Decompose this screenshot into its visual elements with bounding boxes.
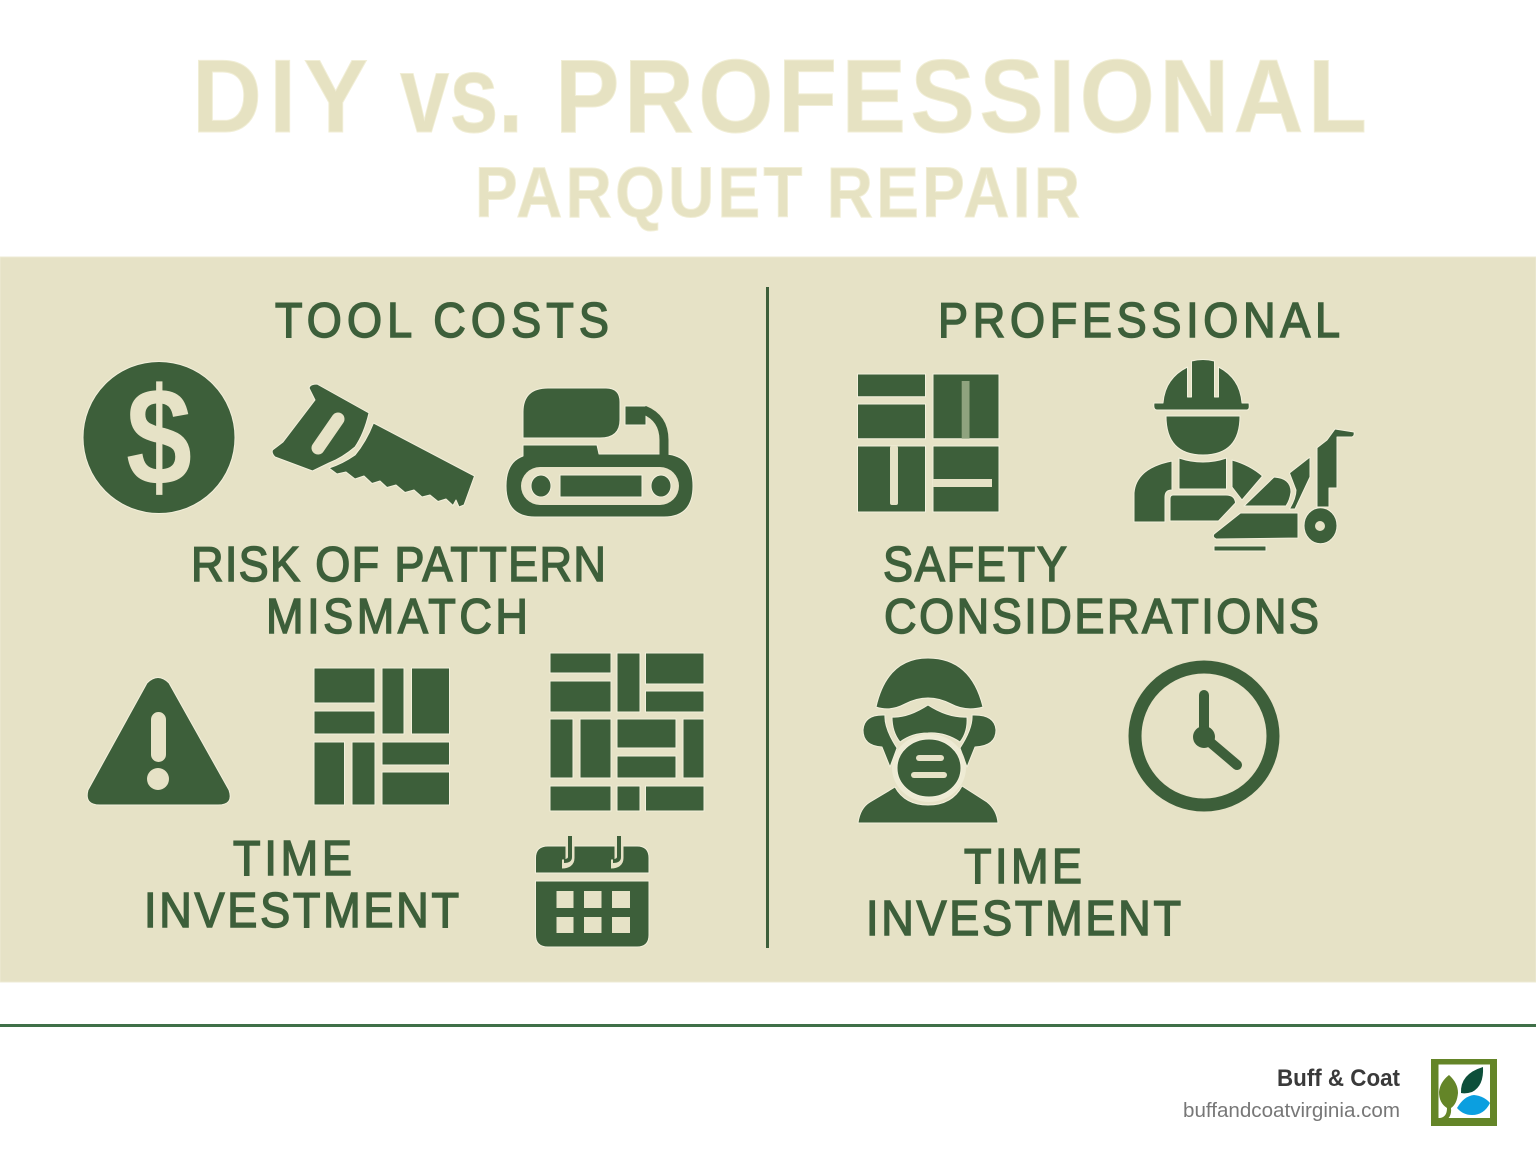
- heading: safety considerations: CONSIDERATIONS: [884, 588, 1319, 643]
- heading: professional: PROFESSIONAL: [938, 292, 1340, 347]
- column: DIY: [83, 292, 704, 947]
- heading: time investment: TIME: [233, 830, 352, 885]
- heading: risk of pattern mismatch: RISK OF PATTERN: [191, 536, 606, 591]
- icon: clock: [1135, 667, 1273, 805]
- icon: warning triangle: [87, 678, 230, 805]
- heading: time investment: [866, 838, 1181, 945]
- column: professional: [858, 292, 1354, 945]
- heading: tool costs: TOOL COSTS: [275, 292, 609, 347]
- title: [192, 33, 1367, 233]
- heading: risk of pattern mismatch: [191, 536, 606, 643]
- title line 2: PARQUET REPAIR: [475, 154, 1080, 233]
- icon: dollar coin: $: [126, 360, 192, 514]
- panel: comparison: [0, 257, 1536, 982]
- icon: parquet pattern small: [314, 668, 450, 805]
- icon: person with respirator mask: [858, 658, 998, 823]
- footer brand text: Buff & Coat: [1277, 1065, 1400, 1092]
- heading: time investment: INVESTMENT: [866, 890, 1181, 945]
- heading: safety considerations: [883, 536, 1319, 643]
- icon: dollar coin: [83, 360, 235, 514]
- title line 1: [192, 33, 1367, 156]
- heading: safety considerations: SAFETY: [883, 536, 1067, 591]
- icon: worker with floor sander: [1134, 360, 1354, 551]
- icon: calendar: [536, 836, 649, 947]
- footer brand text: [1183, 1065, 1400, 1122]
- title line 1: PROFESSIONAL: [555, 39, 1367, 155]
- logo: [1431, 1059, 1497, 1126]
- title line 1: vs.: [400, 33, 523, 156]
- icon: parquet tile: [858, 374, 999, 512]
- icon: parquet pattern large: [550, 653, 704, 811]
- title line 1: DIY: [192, 39, 368, 155]
- footer rule: [0, 1024, 1536, 1027]
- icon: hand saw: [272, 384, 474, 507]
- heading: risk of pattern mismatch: MISMATCH: [266, 588, 528, 643]
- heading: time investment: [144, 830, 459, 937]
- icon: floor sander: [506, 388, 693, 517]
- footer brand text: buffandcoatvirginia.com: [1183, 1100, 1400, 1122]
- heading: time investment: INVESTMENT: [144, 882, 459, 937]
- heading: time investment: TIME: [964, 838, 1082, 893]
- divider: [766, 287, 769, 948]
